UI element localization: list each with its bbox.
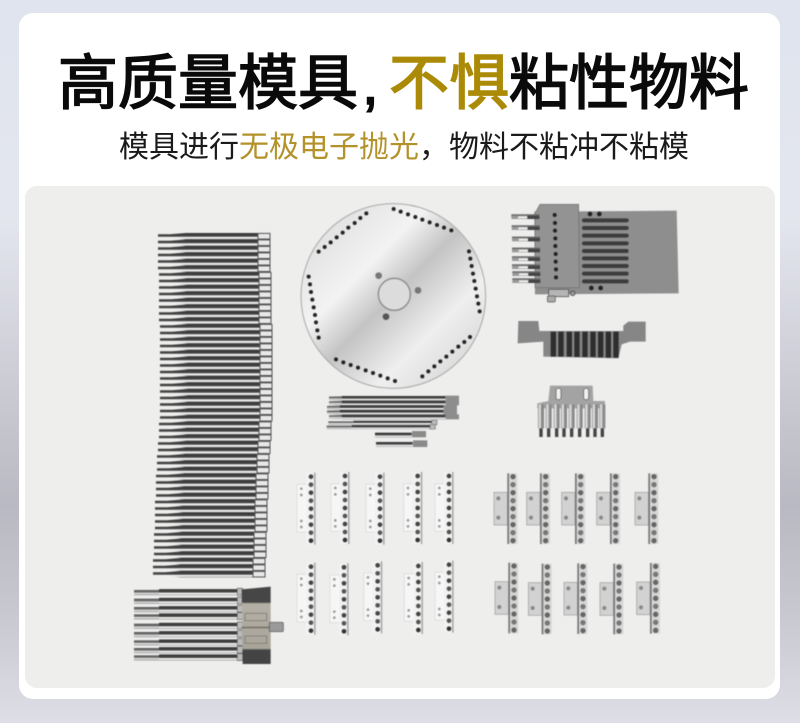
- grey hinge strips: right cluster: [494, 473, 660, 634]
- long ejector pins column: [153, 233, 272, 578]
- finned stripper block: [518, 321, 646, 358]
- guide plate slots: [582, 218, 629, 283]
- bright hinge strips: left cluster: [297, 472, 454, 635]
- subtitle: 模具进行无极电子抛光，物料不粘冲不粘模: [119, 131, 689, 164]
- guide plate holes: [553, 212, 603, 290]
- title: 高质量模具 不惧粘性物料: [58, 50, 749, 117]
- guide plate clamp: [547, 289, 575, 302]
- panel: product photo background: [25, 186, 775, 688]
- pin holder block with punches: [134, 587, 283, 664]
- comb insert: [537, 386, 605, 437]
- guide plate fingers: [511, 214, 540, 283]
- round punch disc with holes: [301, 204, 486, 388]
- disc centre hub: [375, 272, 421, 320]
- short pin set below disc: [327, 396, 459, 447]
- disc perforation holes: [307, 207, 482, 383]
- title: ,: [362, 50, 379, 117]
- slotted guide plate assembly: [511, 204, 679, 302]
